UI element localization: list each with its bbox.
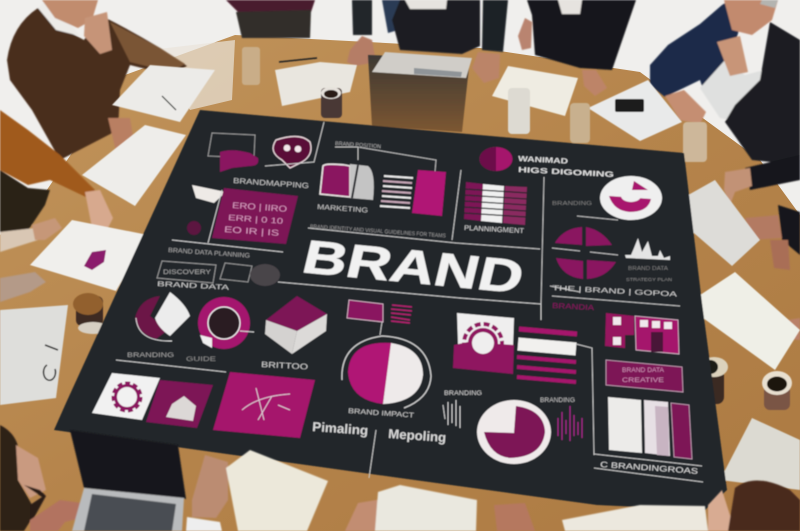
board panel: identity cards bbox=[308, 141, 540, 249]
board panel: magenta text box bbox=[168, 185, 298, 260]
board chart: magenta split ellipse and skyline bbox=[552, 201, 678, 312]
board chart: magenta split ellipse and skyline: THE | BRAND | GOPOA bbox=[552, 285, 678, 299]
board divider lines bbox=[541, 177, 680, 306]
board row: small labels and frames left of title bbox=[157, 261, 541, 304]
board panel: striped bar chart: PLANNINGMENT bbox=[464, 225, 525, 235]
board chart: small bars and pie: BRANDING bbox=[540, 398, 575, 404]
board row: small labels and frames left of title: BRAND DATA bbox=[157, 281, 230, 292]
main BRAND title: BRAND bbox=[297, 231, 529, 304]
board icon: cube bbox=[261, 296, 327, 371]
hands and open book bottom centre bbox=[186, 450, 535, 531]
board tiles: gear, house, sketch bbox=[92, 372, 315, 438]
board panel: magenta text box: ERO | IIRO bbox=[232, 200, 288, 214]
board labels: Pimaling and Mepoling: Mepoling bbox=[388, 426, 447, 445]
board chart: small bars and pie: BRANDING bbox=[444, 391, 482, 397]
board chart: magenta split ellipse and skyline: BRAND DATA bbox=[628, 266, 669, 272]
dark brand board bbox=[54, 110, 727, 510]
board panel: identity cards: BRAND IDENTITY AND VISUAL GUIDELINES FOR TEAMS bbox=[310, 224, 446, 240]
board chart: white circle with magenta arc bbox=[600, 176, 662, 220]
board chart: magenta split ellipse and skyline: BRANDIA bbox=[552, 301, 594, 312]
board panel: identity cards: MARKETING bbox=[317, 204, 368, 215]
board heading: top right label bbox=[480, 147, 614, 179]
board heading: top right label: HIGS DIGOMING bbox=[518, 165, 614, 179]
board chart: small bars and pie bbox=[443, 391, 582, 464]
top laptop bbox=[368, 52, 472, 132]
board icon: cube: BRITTOO bbox=[261, 360, 308, 371]
person: right side arms bbox=[724, 155, 800, 340]
person: top right in navy suit bbox=[650, 0, 800, 165]
board tiles: magenta icon grid bbox=[605, 313, 683, 392]
cups and glasses bbox=[73, 47, 792, 410]
board panel: magenta text box: ERR | 0 10 bbox=[228, 213, 284, 226]
board labels: Pimaling and Mepoling: Pimaling bbox=[312, 419, 369, 438]
board chart: half pie: BRAND IMPACT bbox=[348, 408, 415, 420]
person: top centre group bbox=[226, 0, 636, 96]
board small card with text bbox=[347, 300, 412, 335]
board icons: radial charts: GUIDE bbox=[186, 357, 216, 363]
notebook and person bottom right bbox=[562, 480, 800, 531]
board heading: top right label: WANIMAD bbox=[518, 154, 569, 166]
board panel: identity cards: BRAND POSITION bbox=[335, 141, 381, 150]
person: left in orange sweater bbox=[0, 110, 113, 362]
person: bottom left with laptop bbox=[0, 425, 186, 531]
board chart: tall panels bbox=[594, 397, 703, 482]
board icons: radial charts: BRANDING bbox=[127, 352, 174, 359]
board chart: tall panels: C BRANDINGROAS bbox=[600, 460, 698, 476]
board panel: magenta text box: EO IR | IS bbox=[224, 224, 280, 238]
board tiles: magenta icon grid: BRAND DATA bbox=[622, 368, 664, 374]
board tiles: magenta icon grid: CREATIVE bbox=[622, 378, 664, 384]
board icon: gear card with bars bbox=[453, 305, 594, 455]
board chart: half pie bbox=[342, 336, 431, 420]
board panel: magenta text box: BRAND DATA PLANNING bbox=[168, 247, 250, 260]
board chart: magenta split ellipse and skyline: BRANDING bbox=[552, 201, 592, 207]
board labels: Pimaling and Mepoling bbox=[312, 419, 447, 478]
board panel: top left speech bubbles bbox=[208, 122, 324, 190]
board row: small labels and frames left of title: DISCOVERY bbox=[163, 270, 211, 276]
board panel: top left speech bubbles: BRANDMAPPING bbox=[233, 176, 310, 190]
board icons: radial charts bbox=[116, 292, 254, 372]
person: top left in brown jacket bbox=[7, 0, 193, 160]
board chart: magenta split ellipse and skyline: STRATEGY PLAN bbox=[626, 277, 672, 282]
board panel: striped bar chart bbox=[452, 170, 528, 240]
